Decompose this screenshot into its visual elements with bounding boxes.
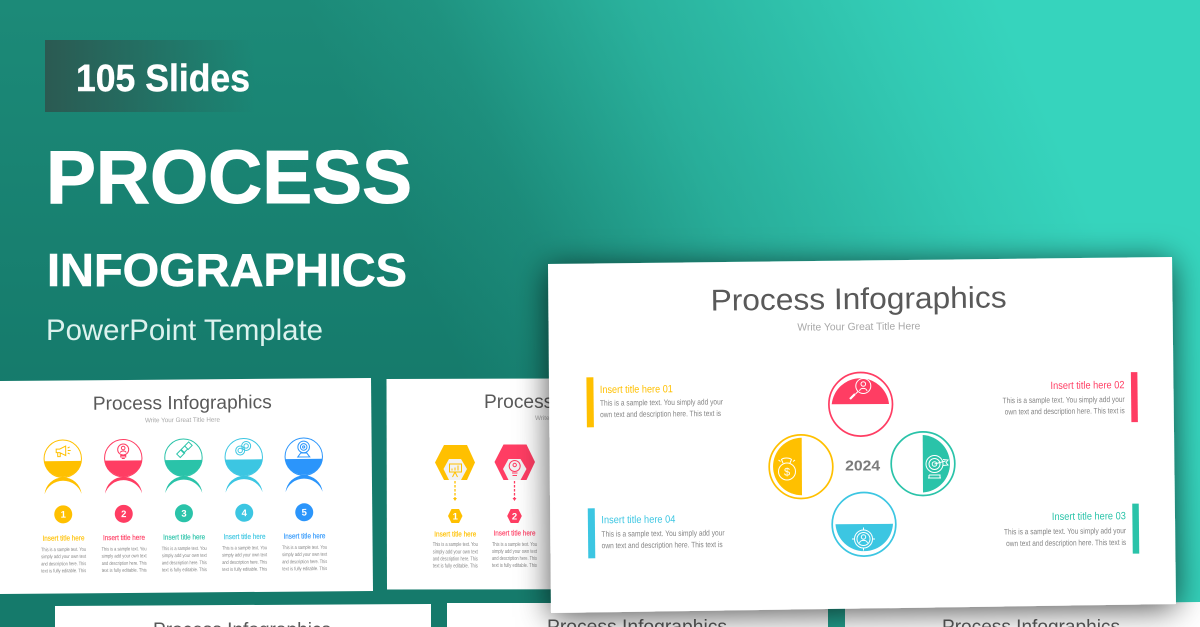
arrow bbox=[453, 481, 457, 501]
step 5: simply add your own text bbox=[282, 552, 328, 558]
icon: light bulb bbox=[509, 460, 520, 476]
badge: 105 slides bbox=[45, 40, 255, 112]
text block 02: This is a sample text. You simply add your bbox=[1003, 395, 1125, 405]
step 5: Insert title here bbox=[283, 531, 325, 541]
step 2: This is a sample text. You bbox=[102, 546, 147, 553]
heading: process: PROCESS bbox=[46, 135, 412, 219]
hex step 1: Insert title here bbox=[434, 529, 476, 538]
icon: satellite bbox=[177, 442, 192, 458]
main slide content bbox=[585, 280, 1139, 559]
text block 01: This is a sample text. You simply add your bbox=[600, 397, 723, 408]
hex step 2 bbox=[492, 444, 537, 569]
text block 01: Insert title here 01 bbox=[600, 383, 673, 396]
badge: 105 slides: 105 Slides bbox=[76, 58, 250, 100]
step 3: Insert title here bbox=[163, 532, 205, 542]
icon: magnifier with person bbox=[850, 378, 871, 399]
icon: light bulb bbox=[118, 444, 129, 459]
hex step 1: This is a sample text. You bbox=[433, 542, 478, 548]
step 5: 5 bbox=[302, 508, 308, 519]
step 2: Insert title here bbox=[103, 533, 145, 542]
circle: yellow money bag bbox=[769, 435, 833, 499]
step 4 bbox=[221, 438, 268, 573]
step 1: 1 bbox=[61, 510, 67, 521]
bottom slide 2 bbox=[447, 603, 828, 627]
step 1: text is fully editable. This bbox=[41, 568, 87, 575]
step 3 bbox=[161, 439, 207, 573]
step 2 bbox=[101, 439, 147, 574]
step 1: Insert title here bbox=[42, 533, 84, 543]
icon: presentation board bbox=[450, 464, 462, 477]
step 3: 3 bbox=[181, 509, 187, 520]
hex step 2: This is a sample text. You bbox=[492, 542, 537, 548]
hex step 2: text is fully editable. This bbox=[492, 563, 537, 569]
text block 03 bbox=[1004, 504, 1139, 555]
step 4: This is a sample text. You bbox=[222, 545, 267, 552]
main subtitle: Write Your Great Title Here bbox=[797, 320, 921, 334]
hex step 2: simply add your own text bbox=[492, 549, 537, 555]
text block 04: This is a sample text. You simply add your bbox=[601, 528, 725, 539]
slide: hexagon process steps bbox=[386, 378, 760, 590]
step 2: text is fully editable. This bbox=[102, 568, 147, 574]
slide: circle process steps bbox=[0, 378, 373, 594]
step 5: and description here. This bbox=[282, 559, 328, 565]
main slide panel bbox=[548, 257, 1176, 613]
step 1: and description here. This bbox=[41, 561, 87, 568]
icon: megaphone bbox=[56, 446, 71, 457]
hex step 1: simply add your own text bbox=[433, 550, 478, 556]
circle: teal target bbox=[891, 432, 955, 496]
text block 03: Insert title here 03 bbox=[1052, 510, 1126, 523]
arrow bbox=[512, 481, 516, 501]
slide title: Process Infographics bbox=[93, 392, 272, 415]
heading: infographics: INFOGRAPHICS bbox=[47, 244, 407, 296]
step 3: and description here. This bbox=[162, 560, 207, 566]
hex step 1: 1 bbox=[453, 511, 459, 522]
text block 04 bbox=[588, 507, 725, 558]
slide subtitle: Write Your Great Title Here bbox=[535, 415, 610, 422]
text block 04: own text and description here. This text is bbox=[602, 540, 723, 550]
text block 01 bbox=[586, 376, 723, 427]
icon: target on stand bbox=[298, 441, 310, 457]
step 5 bbox=[281, 438, 328, 572]
hex step 1 bbox=[433, 445, 478, 570]
text block 03: own text and description here. This text is bbox=[1006, 538, 1126, 548]
step 4: 4 bbox=[242, 508, 248, 519]
hex step 2: Insert title here bbox=[494, 528, 536, 538]
hex step 1: text is fully editable. This bbox=[433, 564, 478, 570]
step 4: Insert title here bbox=[223, 532, 265, 541]
step 2: and description here. This bbox=[102, 561, 147, 567]
circle: cyan crosshair bbox=[832, 492, 896, 556]
icon: target on stand bbox=[926, 456, 948, 478]
step 5: text is fully editable. This bbox=[282, 566, 328, 572]
step 1: simply add your own text bbox=[41, 554, 87, 560]
hex step 2: and description here. This bbox=[492, 556, 537, 562]
text block 02 bbox=[1002, 372, 1138, 424]
subheading: PowerPoint Template bbox=[46, 314, 323, 347]
text block 04: Insert title here 04 bbox=[601, 514, 676, 526]
step 2: 2 bbox=[121, 509, 126, 520]
icon: money bag: $ bbox=[784, 466, 790, 478]
circle: red magnifier bbox=[829, 372, 892, 436]
bottom slide 3 bbox=[845, 602, 1200, 627]
text block 02: Insert title here 02 bbox=[1050, 379, 1125, 392]
step 3: text is fully editable. This bbox=[162, 567, 207, 573]
step 4: and description here. This bbox=[222, 560, 268, 566]
bottom slide 1 bbox=[55, 604, 431, 627]
text block 02: own text and description here. This text is bbox=[1005, 406, 1125, 416]
center year: 2024 bbox=[845, 458, 881, 475]
step 4: simply add your own text bbox=[222, 552, 268, 559]
icon: crosshair with person bbox=[852, 528, 875, 550]
slide subtitle: Write Your Great Title Here bbox=[145, 417, 220, 424]
step 3: simply add your own text bbox=[162, 553, 207, 559]
step 2: simply add your own text bbox=[102, 553, 147, 560]
step 3: This is a sample text. You bbox=[162, 546, 207, 552]
step 1 bbox=[40, 440, 87, 575]
slide title: Process Infographics bbox=[484, 392, 663, 413]
hex step 2: 2 bbox=[512, 511, 517, 522]
text block 03: This is a sample text. You simply add your bbox=[1004, 526, 1126, 536]
hex step 1: and description here. This bbox=[433, 556, 478, 562]
main title: Process Infographics bbox=[710, 281, 1007, 318]
step 1: This is a sample text. You bbox=[41, 547, 86, 553]
step 4: text is fully editable. This bbox=[222, 567, 268, 573]
step 5: This is a sample text. You bbox=[282, 545, 327, 551]
text block 01: own text and description here. This text is bbox=[600, 409, 721, 419]
icon: chain links bbox=[236, 441, 251, 455]
